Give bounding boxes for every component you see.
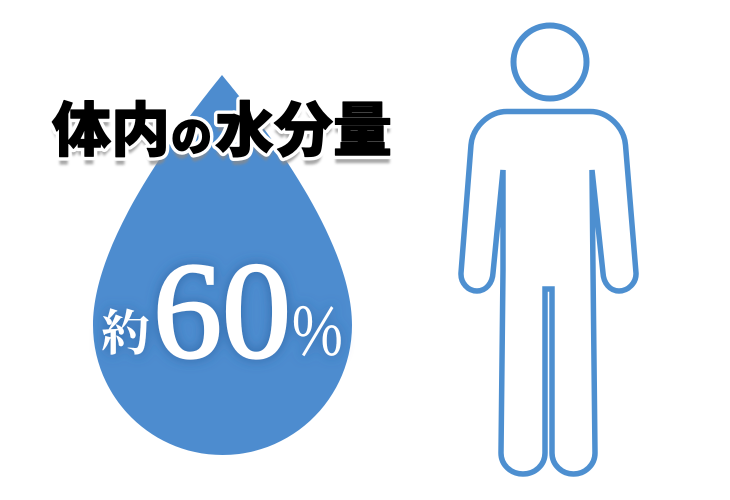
title: 体内の水分量	[52, 98, 392, 164]
title shadow	[52, 106, 392, 172]
icon: human head	[514, 26, 586, 98]
title outline: 内	[111, 98, 170, 164]
title outline: 分	[274, 98, 333, 164]
title shadow: 内	[111, 106, 170, 172]
title shadow: 体	[52, 106, 111, 172]
icon: human body outline	[461, 112, 636, 474]
value: 約60%: 60	[153, 234, 291, 387]
title: 体内の水分量: 量	[333, 98, 392, 164]
title outline: の	[171, 114, 212, 160]
value: 約60%: 約	[101, 306, 150, 361]
title shadow: 分	[274, 106, 333, 172]
title: 体内の水分量: 水	[215, 98, 274, 164]
title outline: 量	[333, 98, 392, 164]
water drop	[93, 75, 352, 455]
title shadow: 水	[215, 106, 274, 172]
title outline: 体	[52, 98, 111, 164]
title: 体内の水分量: 体	[52, 98, 111, 164]
title shadow: の	[171, 122, 212, 168]
value: 約60%: ％	[289, 298, 346, 369]
title shadow: 量	[333, 106, 392, 172]
title outline: 水	[215, 98, 274, 164]
value: 約60%	[101, 234, 346, 387]
title outline	[52, 98, 392, 164]
title: 体内の水分量: の	[171, 114, 212, 160]
title: 体内の水分量: 分	[274, 98, 333, 164]
title: 体内の水分量: 内	[111, 98, 170, 164]
